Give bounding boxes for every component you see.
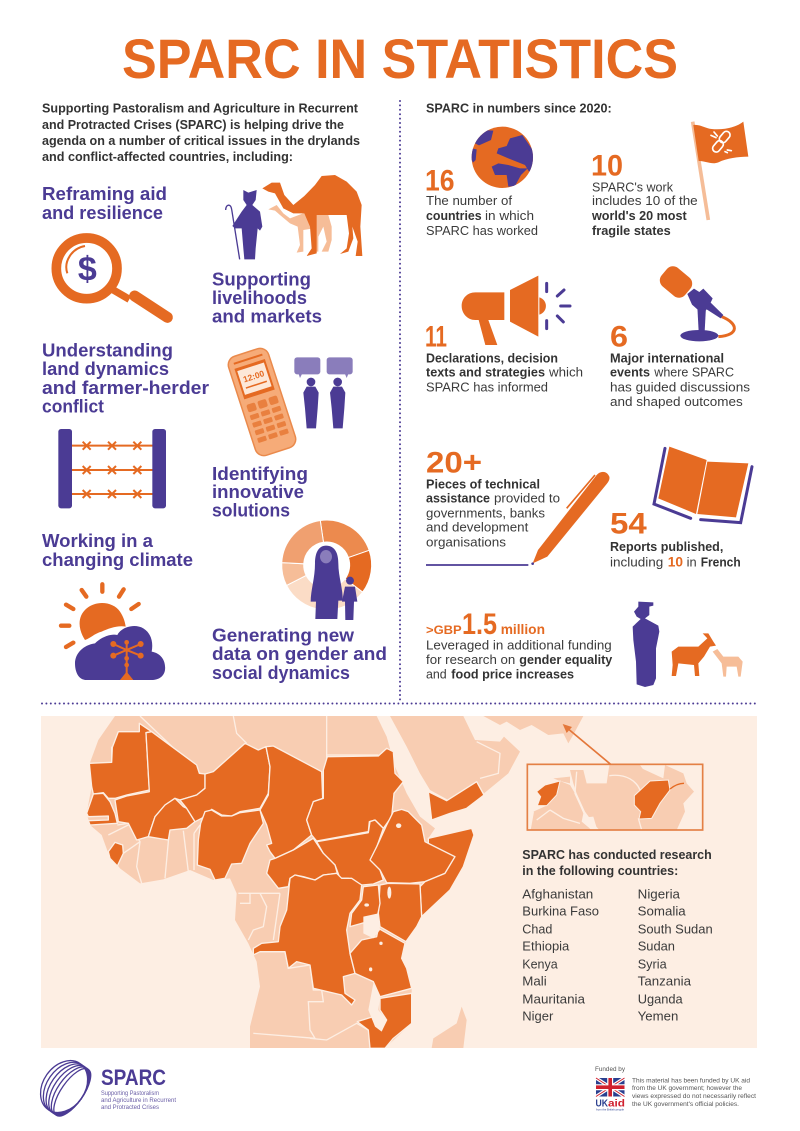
icon: pen drawing a line bbox=[426, 472, 610, 565]
icon: open book bbox=[654, 447, 752, 523]
heading: supporting livelihoods: livelihoods bbox=[212, 288, 307, 308]
Yemen bbox=[428, 782, 484, 820]
Nigeria bbox=[197, 810, 263, 880]
stat: 16 countries: 16 bbox=[425, 165, 454, 198]
stat: 16 countries: The number of bbox=[426, 193, 512, 208]
heading: identifying innovative solutions bbox=[212, 464, 308, 521]
stat: 20+ technical assistance bbox=[426, 446, 560, 550]
Mali bbox=[115, 732, 205, 840]
heading: identifying innovative solutions: solutions bbox=[212, 501, 290, 521]
heading: gender and social dynamics: data on gender and bbox=[212, 644, 387, 664]
intro text: agenda on a number of critical issues in the drylands bbox=[42, 133, 360, 148]
stat: 6 international events: events bbox=[610, 365, 650, 380]
Tanzania bbox=[350, 928, 412, 997]
logo: SPARC: and Protracted Crises bbox=[101, 1104, 159, 1111]
Burkina Faso bbox=[148, 798, 195, 840]
stat: GBP 1.5 million: and bbox=[426, 666, 447, 681]
stat: 54 reports: in bbox=[687, 555, 697, 570]
title: SPARC IN STATISTICS bbox=[122, 27, 678, 90]
icon: magnifying glass bbox=[56, 238, 167, 317]
stat: GBP 1.5 million: >GBP bbox=[426, 623, 462, 637]
heading: land dynamics: Understanding bbox=[42, 341, 173, 361]
country list: Nigeria bbox=[638, 886, 681, 901]
country list: Somalia bbox=[638, 904, 686, 919]
stat: 10 fragile states: world's 20 most bbox=[591, 208, 687, 223]
stat: 6 international events: and shaped outcomes bbox=[610, 394, 743, 409]
heading: identifying innovative solutions: Identifying bbox=[212, 464, 308, 484]
country list: Mauritania bbox=[522, 991, 586, 1006]
icon: microphone bbox=[657, 263, 734, 341]
country list: Burkina Faso bbox=[522, 904, 599, 919]
stat: 16 countries: SPARC has worked bbox=[426, 223, 538, 238]
Senegal bbox=[87, 793, 117, 825]
Mozambique bbox=[357, 993, 412, 1048]
stat: 10 fragile states: includes 10 of the bbox=[592, 193, 698, 208]
icon: megaphone bbox=[462, 276, 570, 345]
Mauritania bbox=[89, 723, 152, 798]
Chad bbox=[260, 746, 323, 858]
icon: mobile phone: 12:00 bbox=[242, 368, 266, 384]
funder: UK aid: Funded by bbox=[595, 1067, 625, 1073]
stat: GBP 1.5 million: for research on bbox=[426, 652, 515, 667]
logo: SPARC bbox=[31, 1052, 176, 1122]
South Sudan bbox=[317, 820, 383, 885]
heading: gender and social dynamics: Generating new bbox=[212, 626, 355, 646]
icon: globe bbox=[470, 127, 535, 188]
Somalia bbox=[420, 828, 474, 917]
country list: Afghanistan bbox=[522, 886, 593, 901]
map of Africa and Arabia bbox=[87, 716, 583, 1048]
stat: 20+ technical assistance: organisations bbox=[426, 535, 506, 550]
stat: 11 declarations: 11 bbox=[425, 321, 447, 354]
Democratic Republic of the Congo bbox=[253, 873, 362, 1005]
heading: land dynamics: and farmer-herder bbox=[42, 378, 209, 398]
stat: 16 countries: in which bbox=[485, 208, 534, 223]
Niger bbox=[180, 743, 270, 822]
funder: UK aid: This material has been funded by UK aid bbox=[632, 1078, 750, 1084]
stat: 11 declarations bbox=[425, 321, 583, 395]
stat: 54 reports bbox=[610, 507, 741, 570]
heading: changing climate: changing climate bbox=[42, 550, 193, 570]
country list: Yemen bbox=[638, 1009, 678, 1024]
Sudan bbox=[307, 748, 403, 841]
stat: GBP 1.5 million bbox=[426, 608, 613, 681]
stat: 20+ technical assistance: provided to bbox=[494, 491, 560, 506]
arrow from inset to Asia bbox=[563, 724, 611, 764]
heading: reframing aid: and resilience bbox=[42, 203, 163, 223]
funder: UK aid: views expressed do not necessarily reflect bbox=[632, 1094, 756, 1100]
funder: UK aid: the UK government's official policies. bbox=[632, 1102, 739, 1108]
icon: mobile phone bbox=[226, 346, 298, 458]
stat: 11 declarations: which bbox=[548, 365, 583, 380]
heading: gender and social dynamics bbox=[212, 626, 387, 683]
stat: 6 international events: Major international bbox=[610, 350, 724, 365]
logo: SPARC: SPARC bbox=[101, 1065, 166, 1090]
Ethiopia bbox=[370, 809, 455, 883]
intro text bbox=[42, 100, 360, 164]
heading: numbers since 2020: SPARC in numbers since 2020: bbox=[426, 101, 612, 116]
stat: 10 fragile states: fragile states bbox=[592, 223, 671, 238]
intro text: and conflict-affected countries, including: bbox=[42, 149, 293, 164]
country list: Kenya bbox=[522, 956, 558, 971]
stat: 16 countries: countries bbox=[426, 208, 482, 223]
Kenya bbox=[378, 883, 422, 942]
country list: Sudan bbox=[638, 939, 675, 954]
country list: Ethiopia bbox=[522, 939, 570, 954]
stat: GBP 1.5 million: gender equality bbox=[519, 652, 613, 667]
stat: 6 international events bbox=[610, 321, 750, 409]
icon: sun and cloud bbox=[61, 584, 165, 680]
heading: land dynamics bbox=[42, 341, 209, 417]
stat: GBP 1.5 million: million bbox=[501, 621, 545, 637]
heading: changing climate: Working in a bbox=[42, 531, 154, 551]
stat: 20+ technical assistance: 20+ bbox=[426, 446, 482, 479]
country list: Niger bbox=[522, 1009, 554, 1024]
country list: Syria bbox=[638, 956, 667, 971]
logo: SPARC: and Agriculture in Recurrent bbox=[101, 1097, 176, 1104]
stat: 11 declarations: texts and strategies bbox=[426, 365, 545, 380]
heading: identifying innovative solutions: innovative bbox=[212, 482, 304, 502]
stat: GBP 1.5 million: food price increases bbox=[451, 666, 574, 681]
stat: 11 declarations: Declarations, decision bbox=[426, 350, 558, 365]
Liberia bbox=[108, 842, 123, 866]
heading: supporting livelihoods bbox=[212, 270, 322, 327]
country list: South Sudan bbox=[638, 921, 713, 936]
icon: flag bbox=[693, 122, 748, 220]
country list: Tanzania bbox=[638, 974, 692, 989]
funder: UK aid bbox=[595, 1067, 756, 1112]
stat: 54 reports: 54 bbox=[610, 507, 647, 540]
stat: 11 declarations: SPARC has informed bbox=[426, 380, 548, 395]
funder: UK aid: from the UK government; however the bbox=[632, 1086, 743, 1092]
heading: land dynamics: conflict bbox=[42, 397, 104, 417]
chart: donut with woman and child bbox=[282, 520, 372, 620]
intro text: Supporting Pastoralism and Agriculture in Recurrent bbox=[42, 100, 359, 116]
stat: 6 international events: 6 bbox=[610, 321, 628, 354]
country list: Uganda bbox=[638, 991, 683, 1006]
icon: magnifying glass: $ bbox=[78, 251, 97, 289]
stat: 10 fragile states bbox=[591, 150, 698, 238]
stat: 16 countries bbox=[425, 165, 538, 238]
stat: GBP 1.5 million: 1.5 bbox=[462, 608, 497, 641]
heading: land dynamics: land dynamics bbox=[42, 359, 169, 379]
heading: supporting livelihoods: and markets bbox=[212, 307, 322, 327]
icon: barbed wire fence bbox=[58, 429, 166, 508]
stat: 20+ technical assistance: Pieces of technical bbox=[426, 476, 540, 491]
icon: herder and camels bbox=[226, 175, 362, 259]
stat: GBP 1.5 million: Leveraged in additional funding bbox=[426, 637, 612, 652]
stat: 20+ technical assistance: assistance bbox=[426, 491, 490, 506]
country list: SPARC has conducted research bbox=[522, 847, 712, 862]
stat: 54 reports: French bbox=[701, 555, 741, 570]
stat: 6 international events: has guided discussions bbox=[610, 380, 750, 395]
country list: Mali bbox=[522, 974, 547, 989]
stat: 10 fragile states: SPARC's work bbox=[592, 180, 674, 195]
stat: 10 fragile states: 10 bbox=[591, 150, 623, 183]
country list: in the following countries: bbox=[522, 863, 678, 878]
icon: two people with speech bubbles bbox=[294, 357, 353, 428]
country list: Chad bbox=[522, 921, 552, 936]
Central African Republic bbox=[267, 838, 337, 888]
heading: gender and social dynamics: social dynamics bbox=[212, 663, 350, 683]
country list bbox=[522, 847, 713, 1024]
stat: 6 international events: where SPARC bbox=[653, 365, 734, 380]
stat: 20+ technical assistance: governments, banks bbox=[426, 505, 545, 520]
stat: 54 reports: including bbox=[610, 555, 663, 570]
Uganda bbox=[350, 885, 380, 927]
panel: map bbox=[41, 716, 757, 1048]
heading: reframing aid: Reframing aid bbox=[42, 184, 167, 204]
stat: 20+ technical assistance: and development bbox=[426, 520, 529, 535]
icon: woman with goats bbox=[633, 602, 743, 687]
logo: SPARC: Supporting Pastoralism bbox=[101, 1090, 159, 1097]
funder: UK aid: from the British people bbox=[596, 1108, 624, 1112]
map inset: Syria and Afghanistan bbox=[527, 764, 703, 830]
heading: reframing aid bbox=[42, 184, 167, 223]
intro text: and Protracted Crises (SPARC) is helping drive the bbox=[42, 117, 344, 132]
funder: UK aid: UK bbox=[596, 1098, 608, 1110]
stat: 54 reports: Reports published, bbox=[610, 539, 723, 554]
funder: UK aid: aid bbox=[608, 1098, 625, 1110]
stat: 54 reports: 10 bbox=[668, 554, 683, 570]
heading: changing climate bbox=[42, 531, 193, 570]
heading: supporting livelihoods: Supporting bbox=[212, 270, 311, 290]
